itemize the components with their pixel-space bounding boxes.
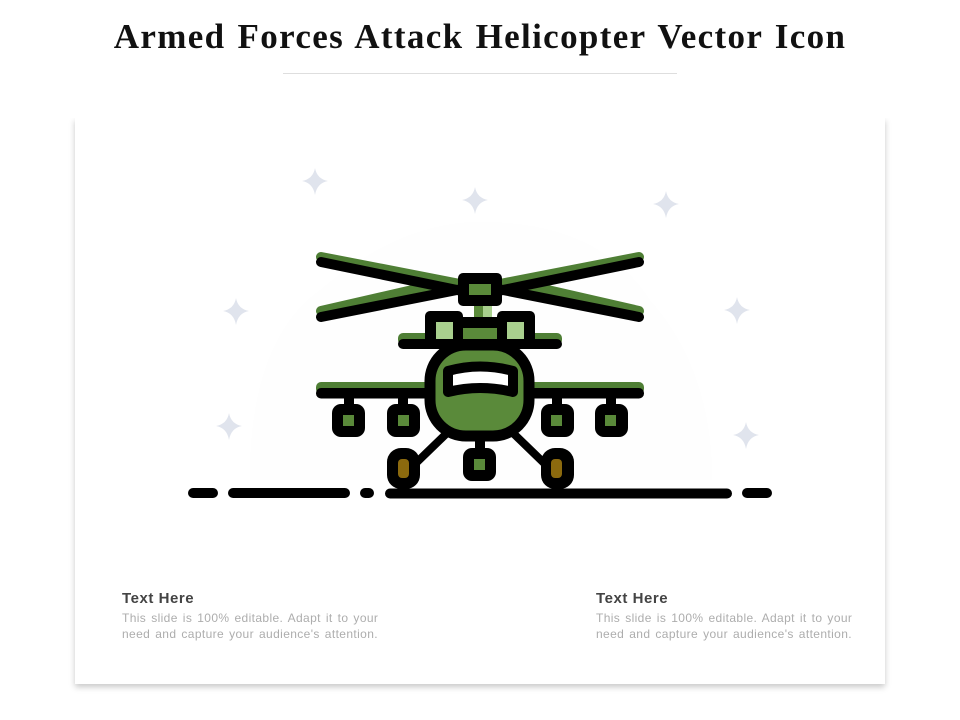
pylons — [344, 396, 616, 450]
ground line dashes — [188, 488, 772, 498]
text block: left — [122, 590, 378, 641]
wheels — [387, 448, 574, 489]
text block: left: This slide is 100% editable. Adapt it to your — [122, 611, 378, 625]
main wing — [316, 382, 644, 394]
upper wing — [398, 333, 562, 345]
icon: helicopter — [316, 257, 644, 489]
landing legs — [415, 434, 545, 464]
title: Armed Forces Attack Helicopter Vector Icon — [114, 17, 846, 56]
icon: sparkle stars — [216, 168, 759, 449]
fuselage — [430, 345, 529, 436]
weapon pods — [332, 404, 628, 481]
engines — [425, 311, 463, 349]
text block: right: This slide is 100% editable. Adapt it to your — [596, 611, 852, 625]
text block: right: Text Here — [596, 590, 668, 607]
text block: right: need and capture your audience's attention. — [596, 627, 852, 641]
text block: left: need and capture your audience's attention. — [122, 627, 378, 641]
panel: white card — [75, 118, 885, 684]
text block: right — [596, 590, 852, 641]
cockpit window — [448, 366, 513, 392]
rotor mast — [474, 304, 483, 318]
rotor blades — [321, 257, 639, 317]
text block: left: Text Here — [122, 590, 194, 607]
faint background blob — [250, 222, 712, 480]
rotor hub — [458, 273, 502, 306]
